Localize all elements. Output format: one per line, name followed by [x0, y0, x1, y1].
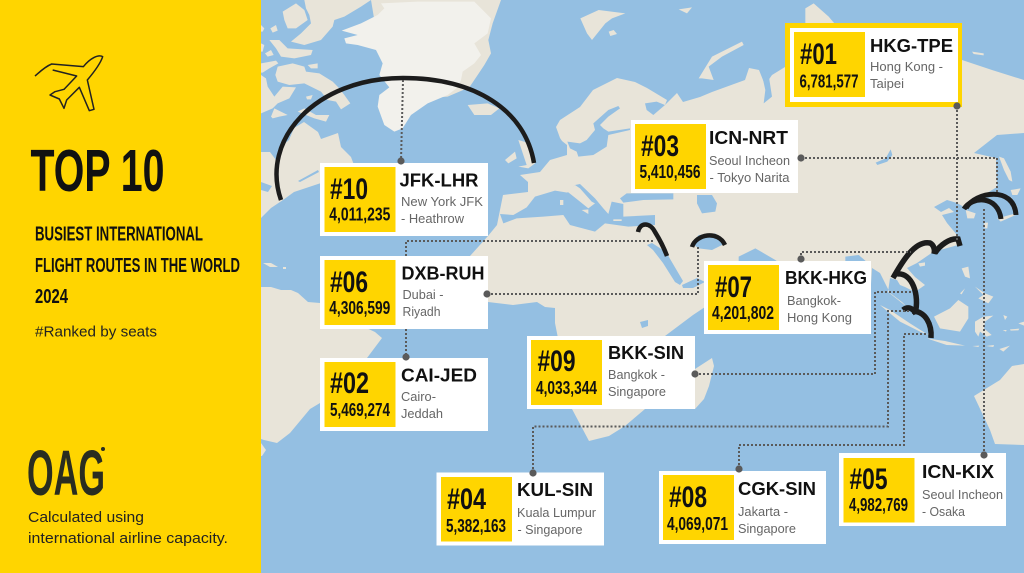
- card: #07 BKK-HKG: 4,201,802: [712, 302, 774, 323]
- card: #05 ICN-KIX: - Osaka: [922, 504, 966, 519]
- arc: ICN-NRT: [964, 200, 1001, 219]
- card: #05 ICN-KIX: ICN-KIX: [922, 462, 994, 482]
- card: #07 BKK-HKG: BKK-HKG: [785, 268, 867, 288]
- card: #04 KUL-SIN: 5,382,163: [446, 515, 506, 536]
- card: #05 ICN-KIX: Seoul Incheon: [922, 487, 1003, 502]
- capacity note: international airline capacity.: [28, 530, 228, 547]
- card: #08 CGK-SIN: Jakarta -: [738, 504, 788, 519]
- card: #04 KUL-SIN: #04: [447, 483, 486, 516]
- ranked by seats note: #Ranked by seats: [35, 324, 157, 340]
- card: #01 HKG-TPE: Taipei: [870, 76, 904, 91]
- eurasia and africa landmass: [470, 50, 1024, 441]
- card: #03 ICN-NRT: 5,410,456: [640, 161, 700, 182]
- arc: CAI-JED: [638, 224, 667, 256]
- card: #09 BKK-SIN: [527, 336, 695, 409]
- OAG logo: OAG: [27, 437, 105, 509]
- card: #07 BKK-HKG: Hong Kong: [787, 310, 852, 325]
- card: #03 ICN-NRT: - Tokyo Narita: [710, 170, 790, 185]
- card: #05 ICN-KIX: 4,982,769: [849, 494, 908, 515]
- card: #03 ICN-NRT: [631, 120, 798, 193]
- arc: KUL-SIN: [903, 308, 916, 314]
- southeast asia, indonesia and australia: [880, 262, 1024, 352]
- card: #03 ICN-NRT: Seoul Incheon: [709, 153, 790, 168]
- card: #03 ICN-NRT: ICN-NRT: [709, 128, 788, 148]
- card: #01 HKG-TPE: Hong Kong -: [870, 59, 943, 74]
- route arcs: [277, 78, 1016, 338]
- card: #09 BKK-SIN: #09: [538, 345, 576, 378]
- title: top 10: TOP 10: [30, 138, 164, 204]
- card: #07 BKK-HKG: Bangkok-: [787, 293, 841, 308]
- card: #10 JFK-LHR: JFK-LHR: [400, 170, 478, 190]
- connector end dots: [397, 102, 988, 477]
- card: #06 DXB-RUH: #06: [330, 266, 368, 299]
- card: #02 CAI-JED: #02: [330, 367, 369, 400]
- card: #01 HKG-TPE: HKG-TPE: [870, 36, 953, 56]
- card: #03 ICN-NRT: #03: [641, 130, 679, 163]
- card: #09 BKK-SIN: Singapore: [608, 384, 666, 399]
- card: #05 ICN-KIX: #05: [850, 463, 888, 496]
- madagascar: [695, 358, 714, 409]
- card: #09 BKK-SIN: 4,033,344: [536, 377, 598, 398]
- card: #08 CGK-SIN: Singapore: [738, 521, 796, 536]
- subtitle: BUSIEST INTERNATIONAL: [35, 224, 203, 246]
- OAG logo: [27, 437, 105, 509]
- card: #05 ICN-KIX: [839, 453, 1006, 526]
- card: #10 JFK-LHR: New York JFK: [401, 194, 483, 209]
- card: #06 DXB-RUH: Dubai -: [402, 287, 444, 302]
- arc: DXB-RUH: [692, 235, 725, 247]
- card: #04 KUL-SIN: [436, 472, 604, 546]
- card: #02 CAI-JED: [320, 358, 488, 431]
- card: #06 DXB-RUH: [320, 256, 488, 329]
- south america: [261, 287, 382, 443]
- seas and lakes: [500, 102, 673, 232]
- card: #10 JFK-LHR: #10: [330, 173, 368, 206]
- card: #04 KUL-SIN: KUL-SIN: [517, 480, 593, 500]
- card: #07 BKK-HKG: #07: [715, 271, 752, 304]
- arc: HKG-TPE: [935, 239, 960, 253]
- card: #09 BKK-SIN: Bangkok -: [608, 367, 665, 382]
- card: #06 DXB-RUH: 4,306,599: [329, 297, 390, 318]
- card: #02 CAI-JED: Cairo-: [401, 389, 436, 404]
- card: #09 BKK-SIN: BKK-SIN: [608, 343, 684, 363]
- caribbean islands: [263, 263, 278, 267]
- arc: BKK-HKG: [893, 243, 934, 278]
- card: #02 CAI-JED: CAI-JED: [401, 366, 477, 386]
- card: #08 CGK-SIN: CGK-SIN: [738, 479, 816, 499]
- subtitle: [35, 224, 240, 308]
- icon: airplane: [35, 56, 103, 111]
- capacity note: Calculated using: [28, 509, 144, 526]
- arc: CGK-SIN: [912, 311, 931, 338]
- card: #10 JFK-LHR: - Heathrow: [401, 211, 465, 226]
- card: #01 HKG-TPE: #01: [800, 38, 837, 71]
- card: #04 KUL-SIN: Kuala Lumpur: [517, 505, 597, 520]
- card: #08 CGK-SIN: #08: [669, 481, 707, 514]
- card: #08 CGK-SIN: 4,069,071: [667, 513, 728, 534]
- subtitle: FLIGHT ROUTES IN THE WORLD: [35, 255, 240, 277]
- dotted connectors: [401, 80, 997, 473]
- card: #08 CGK-SIN: [659, 471, 826, 544]
- north america: [261, 122, 354, 218]
- arc: BKK-SIN: [897, 274, 916, 314]
- arc: ICN-KIX: [966, 194, 1016, 215]
- card: #06 DXB-RUH: DXB-RUH: [402, 264, 484, 284]
- card: #06 DXB-RUH: Riyadh: [402, 304, 440, 319]
- card: #10 JFK-LHR: [320, 163, 488, 236]
- card: #02 CAI-JED: Jeddah: [401, 406, 443, 421]
- subtitle: 2024: [35, 286, 69, 308]
- card: #10 JFK-LHR: 4,011,235: [329, 204, 390, 225]
- card: #01 HKG-TPE: [785, 23, 962, 107]
- card: #07 BKK-HKG: [704, 261, 871, 334]
- capacity note: [28, 509, 228, 547]
- arctic canada and greenland: [261, 0, 501, 132]
- arc: JFK-LHR: [277, 78, 534, 200]
- world map background: [261, 0, 1024, 573]
- card: #01 HKG-TPE: 6,781,577: [800, 70, 858, 92]
- left yellow panel: [0, 0, 261, 573]
- card: #04 KUL-SIN: - Singapore: [518, 522, 582, 537]
- card: #02 CAI-JED: 5,469,274: [330, 399, 391, 420]
